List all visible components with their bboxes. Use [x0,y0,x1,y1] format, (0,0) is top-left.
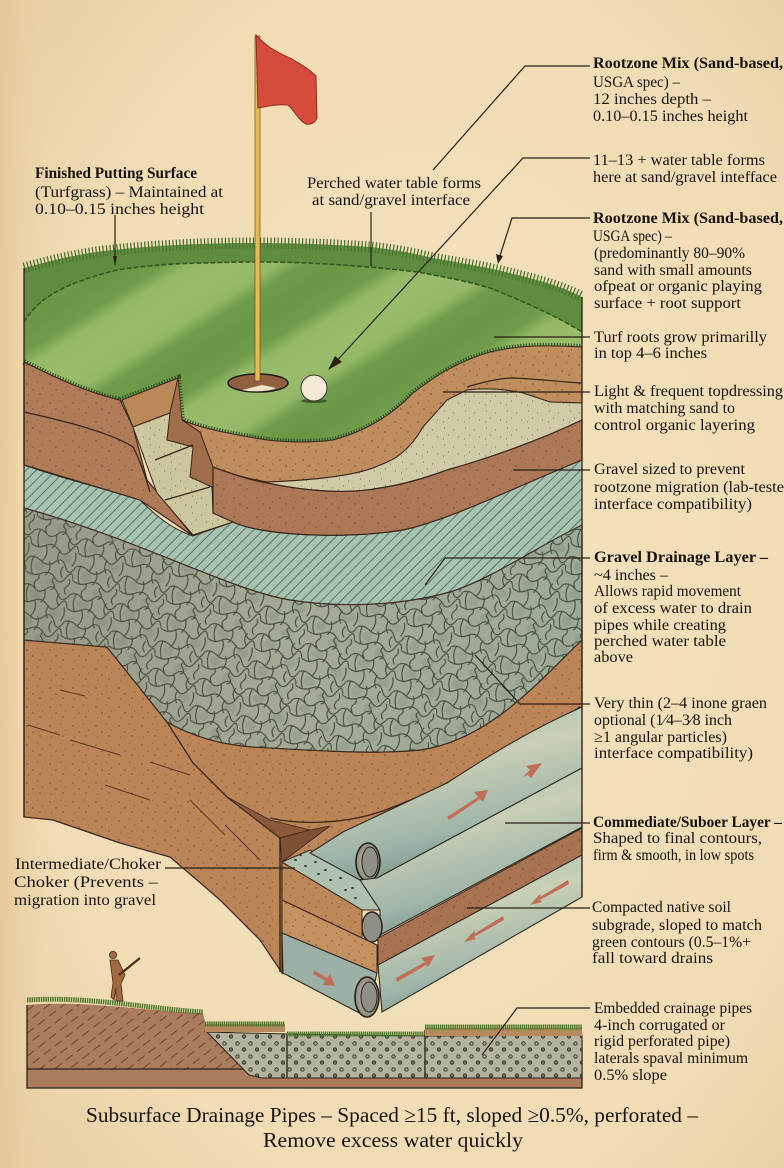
flow arrow [530,880,569,905]
diagonal hatching on hill [27,1004,249,1070]
lower tan and brown soil mass [24,640,582,973]
label: suboer layer: Commediate/Suboer Layer – [593,814,783,831]
label: suboer layer: firm & smooth, in low spots [593,847,754,864]
bottom caption: Remove excess water quickly [263,1128,524,1152]
label: water table: 11–13 + water table forms [593,152,765,169]
leader: compacted subgrade [467,907,590,909]
label: finished putting surface: 0.10–0.15 inches height [35,201,205,218]
label: perched water table: at sand/gravel interface [312,192,470,209]
label: compacted subgrade: subgrade, sloped to match [592,917,762,934]
leader: perched water table [370,212,372,266]
label: rootzone mix top: Rootzone Mix (Sand-based, [593,55,783,72]
flow arrow [313,970,335,986]
label: suboer layer: Shaped to final contours, [593,830,762,847]
label: topdressing: Light & frequent topdressing [594,383,783,400]
blue hatched water layer [24,460,582,605]
label: rootzone composition: surface + root support [594,295,742,312]
inner strata line [467,378,582,387]
label: rootzone mix top: 12 inches depth – [593,91,712,108]
cross-section side edges [24,268,582,972]
label: turf roots [594,329,767,362]
label: turf roots: Turf roots grow primarilly [594,329,767,346]
red flag [256,35,317,124]
label: gravel sizing: interface compatibility) [594,496,752,513]
label: finished putting surface [35,165,224,218]
label: perched water table: Perched water table forms [307,175,481,192]
label: topdressing [594,383,783,434]
label: gravel drainage layer: Gravel Drainage Layer – [594,549,769,566]
label: gravel drainage layer: Allows rapid movement [594,583,742,600]
compacted brown band speckle [378,828,582,965]
label: rootzone mix top: USGA spec) – [593,74,681,91]
leader: rootzone top [433,66,590,170]
leader: very thin [475,655,590,704]
label: topdressing: with matching sand to [594,400,735,417]
label: rootzone mix top: 0.10–0.15 inches height [593,108,749,125]
label: water table [593,152,777,186]
pale sand layer [267,389,582,491]
label: very thin layer: interface compatibility) [594,745,753,762]
label: rootzone mix top [593,55,783,125]
leader: rootzone composition arrow [496,218,590,264]
label: embedded pipes: rigid perforated pipe) [594,1033,730,1050]
flow arrow [464,916,504,942]
label: intermediate choker: migration into gravel [14,892,157,909]
label: gravel sizing: rootzone migration (lab-teste [594,479,784,496]
flow arrow [523,763,542,778]
brown soil blocks left [282,862,377,973]
leader: intermediate choker [165,867,295,869]
bottom pipe [282,855,582,1017]
label: topdressing: control organic layering [594,417,755,434]
label: gravel sizing [594,461,784,513]
label: water table: here at sand/gravel intefface [593,169,777,186]
label: gravel drainage layer: perched water table [594,633,726,650]
label: compacted subgrade: Compacted native soil [592,899,732,916]
golf ball [301,375,327,403]
label: embedded pipes [594,1000,752,1084]
label: gravel drainage layer: of excess water to drain [594,600,752,617]
base line [27,1005,582,1088]
label: embedded pipes: 4-inch corrugated or [594,1017,726,1034]
leader: embedded pipes [482,1008,590,1055]
label: rootzone composition [593,210,783,312]
lower brown layer speckle [213,420,582,535]
label: finished putting surface: Finished Putting Surface [35,165,197,182]
label: finished putting surface: (Turfgrass) – Maintained at [35,184,224,201]
grass strips [27,999,582,1034]
topsoil strips [205,1024,582,1036]
leader: gravel drainage [425,558,590,585]
label: gravel sizing: Gravel sized to prevent [594,461,746,478]
label: intermediate choker [14,856,162,909]
label: embedded pipes: laterals spaval minimum [594,1050,749,1067]
label: rootzone composition: Rootzone Mix (Sand-based, [593,210,783,227]
bottom caption [86,1103,698,1152]
label: intermediate choker: Choker (Prevents – [14,874,159,891]
leader: finished putting surface [113,215,117,266]
dots on choker surface [295,855,356,898]
leader: gravel sized [513,469,590,471]
label: embedded pipes: 0.5% slope [594,1067,667,1084]
label: very thin layer: optional (1⁄4–3⁄8 inch [594,712,732,729]
label: very thin layer: ≥1 angular particles) [594,729,727,746]
cup hole [228,374,288,392]
brown native soil [27,1004,582,1088]
label: gravel drainage layer: ~4 inches – [594,567,669,584]
label: gravel drainage layer: pipes while creating [594,617,726,634]
flow arrow [396,955,435,982]
label: gravel drainage layer [594,549,769,666]
label: turf roots: in top 4–6 inches [594,345,707,362]
bottom caption: Subsurface Drainage Pipes – Spaced ≥15 ft, sloped ≥0.5%, perforated – [86,1103,698,1127]
leader: turf roots [494,336,590,338]
gravel drainage layer [24,508,582,752]
section dividers [287,1030,425,1078]
stacked drainage pipes block [282,707,582,1017]
leader lines and arrows [113,66,590,1055]
label: rootzone composition: sand with small amounts [594,262,752,279]
leader: topdressing [443,391,590,393]
flag pole [255,36,260,381]
dotted choker surface [282,850,380,910]
turf and putting surface [24,243,582,442]
leader: suboer layer [505,822,590,824]
rootzone brown layer speckle [182,346,582,482]
pale sand layer speckle [267,389,582,491]
label: compacted subgrade: fall toward drains [592,950,713,967]
label: compacted subgrade: green contours (0.5–1%+ [592,934,751,951]
brown rootzone layers left of notch [24,362,213,536]
label: embedded pipes: Embedded crainage pipes [594,1000,752,1017]
label: gravel drainage layer: above [594,649,633,666]
label: rootzone composition: USGA spec) – [593,228,673,245]
rootzone brown layer [182,346,582,482]
second pipe [360,768,582,942]
golf green cross-section illustration [24,35,582,1017]
label: perched water table [307,175,481,209]
small lower section diagram [27,951,582,1088]
label: very thin layer [594,695,767,762]
flow arrow [447,790,488,820]
label: compacted subgrade [592,899,762,967]
walking figure with club [109,951,140,1001]
label: rootzone composition: (predominantly 80–90% [594,245,745,262]
label: very thin layer: Very thin (2–4 inone graen [594,695,767,712]
label: rootzone composition: ofpeat or organic playing [594,278,762,295]
top pipe [310,707,582,881]
compacted brown band [378,828,582,965]
lower brown layer [213,420,582,535]
label: intermediate choker: Intermediate/Choker [15,856,162,873]
sand bunker steps [133,413,233,535]
leader: water table arrow to ball [328,158,590,370]
label: suboer layer [593,814,783,864]
perforated gravel bed [207,1032,582,1078]
